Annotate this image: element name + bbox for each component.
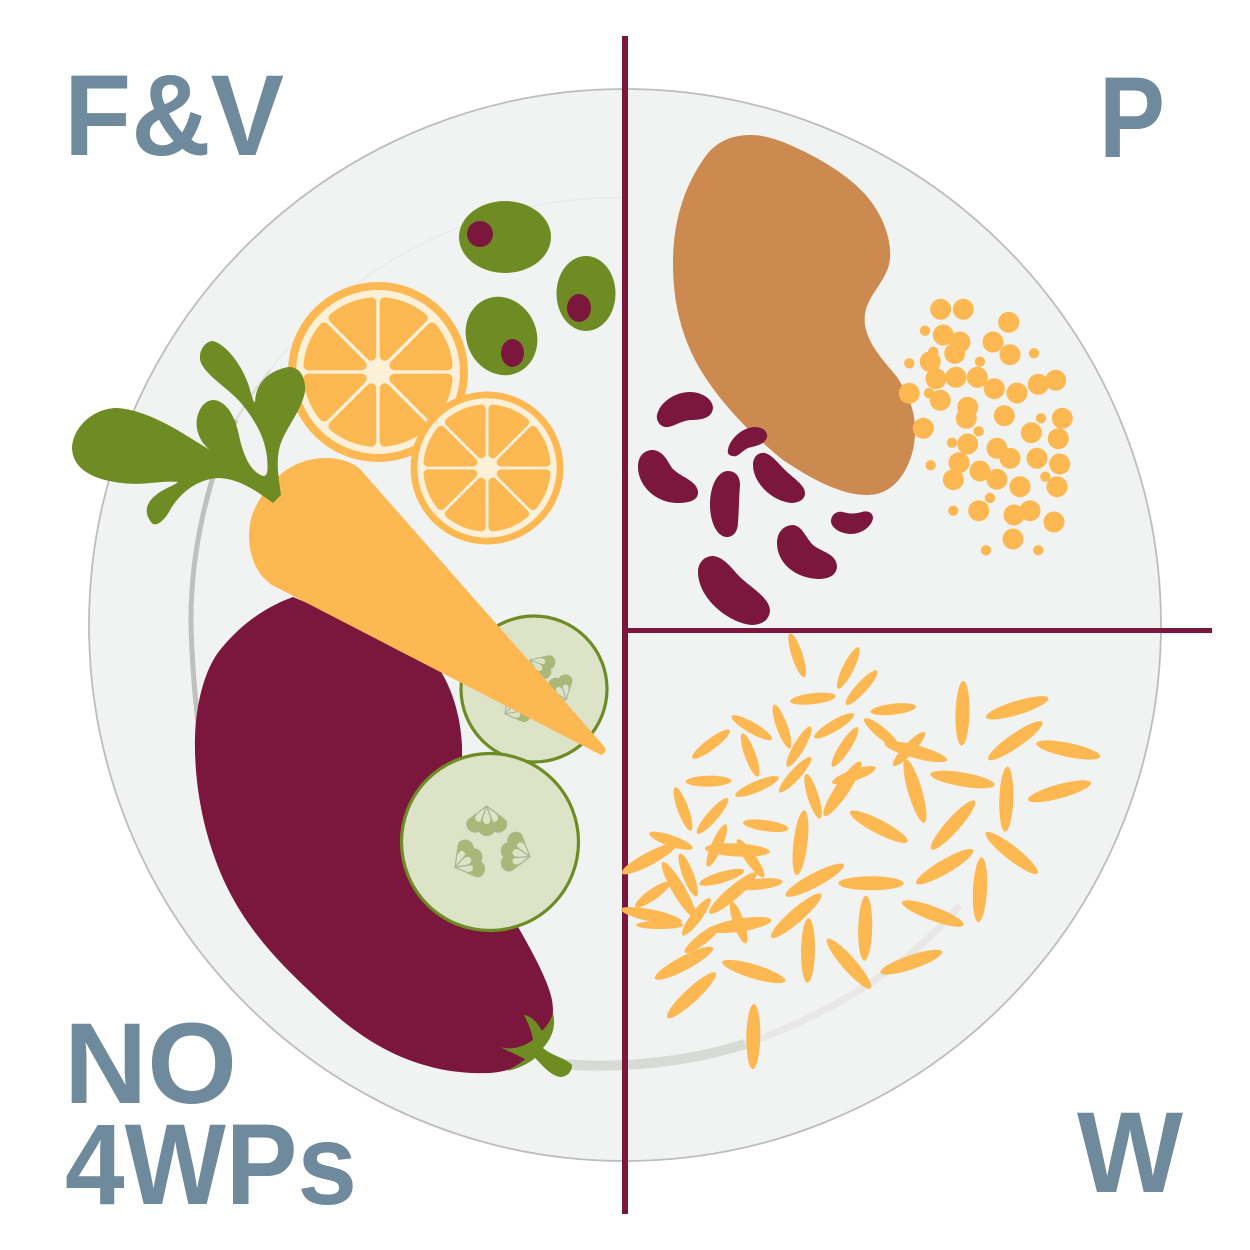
eggplant xyxy=(195,597,572,1077)
orange slice: large xyxy=(288,282,468,462)
carrot xyxy=(72,341,606,755)
horizontal divider xyxy=(625,628,1212,633)
large kidney bean xyxy=(673,135,915,495)
label: W: W xyxy=(1077,1089,1183,1217)
icon: carrot leaves xyxy=(72,341,305,524)
icon: eggplant stem xyxy=(500,1013,572,1077)
label: 4WPs: 4WPs xyxy=(65,1101,357,1229)
lentils xyxy=(899,299,1073,556)
cucumber slice: front xyxy=(402,754,578,930)
vertical divider xyxy=(622,36,628,1214)
label: P: P xyxy=(1099,54,1165,182)
olives xyxy=(453,201,616,387)
kidney beans xyxy=(638,392,873,625)
label: NO: NO xyxy=(64,1000,237,1128)
cucumber slice: back xyxy=(461,616,607,762)
orzo grains xyxy=(619,632,1102,1069)
plate xyxy=(89,89,1161,1161)
label: F&V: F&V xyxy=(64,52,284,180)
orange slice: small xyxy=(410,392,564,544)
